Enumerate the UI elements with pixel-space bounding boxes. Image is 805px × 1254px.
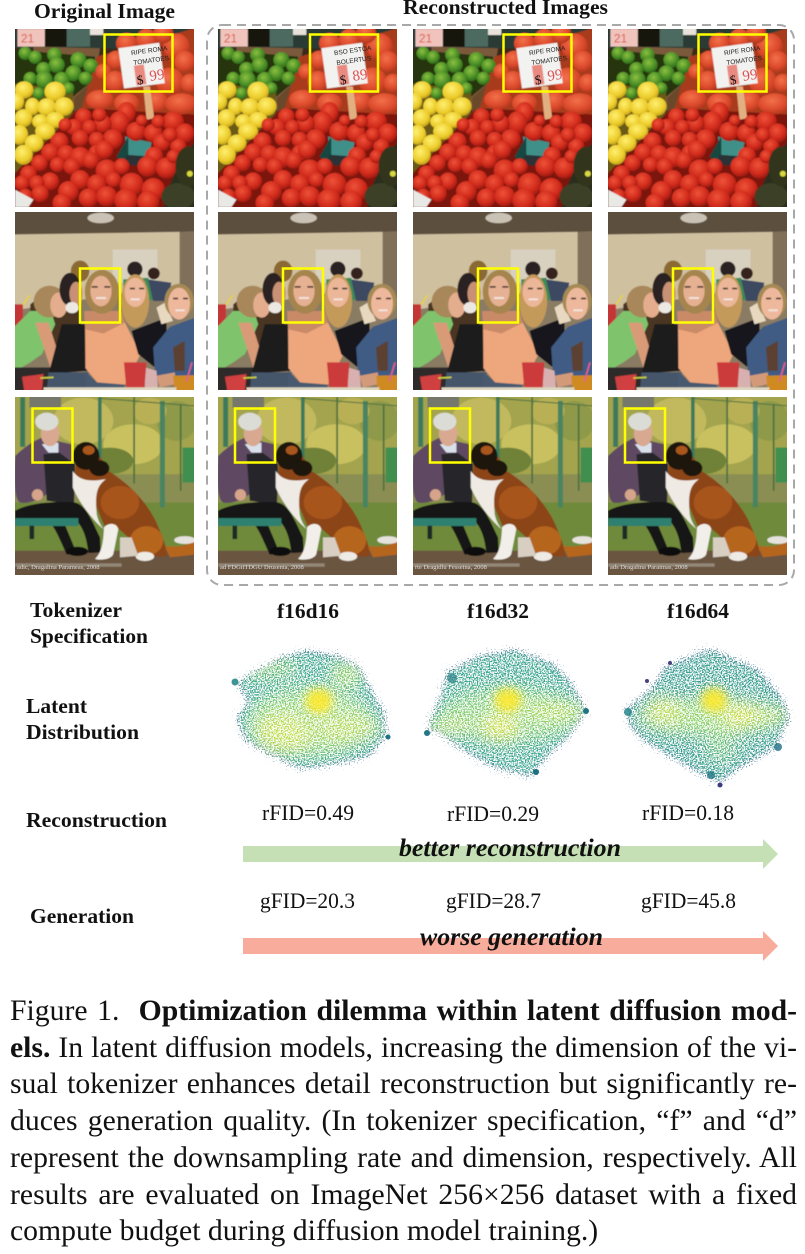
metric: rFID f16d32: rFID=0.29 (447, 801, 539, 826)
column label: f16d16: f16d16 (277, 599, 339, 623)
panel: f16d64 tomatoes image (603, 23, 794, 213)
figure caption: els. In latent diffusion models, increasing the dimension of the vi- (10, 1032, 797, 1064)
panel: f16d16 group photo (213, 208, 403, 397)
panel: f16d64 dog photo: ads Dragalina Paraimas, 2008 (610, 564, 688, 571)
figure caption: compute budget during diffusion model training.) (10, 1215, 598, 1247)
panel: f16d16 tomatoes image: 89 (351, 67, 369, 85)
row label: Generation: Generation (30, 904, 134, 928)
metric: gFID f16d64: gFID=45.8 (641, 888, 736, 913)
figure caption: duces generation quality. (In tokenizer specification, “f” and “d” (10, 1105, 797, 1137)
panel: f16d16 tomatoes image: $ (339, 72, 348, 88)
panel: f16d16 tomatoes image (213, 23, 404, 213)
panel: f16d64 tomatoes image: TOMATOES (726, 55, 763, 67)
metric: rFID f16d64: rFID=0.18 (642, 800, 734, 825)
panel: f16d64 tomatoes image: RIPE ROMA (724, 45, 761, 57)
row label: Tokenizer Specification: Specification (30, 624, 148, 648)
column label: f16d32: f16d32 (467, 599, 529, 623)
column label: f16d64: f16d64 (667, 599, 729, 623)
scatter plot: f16d16 latent distribution (231, 650, 390, 769)
dashed frame around reconstructed images (207, 25, 794, 585)
panel: original tomatoes image: RIPE ROMA (131, 45, 168, 57)
figure caption: Figure 1. Optimization dilemma within latent diffusion mod- (10, 995, 797, 1027)
panel: f16d32 tomatoes image (408, 23, 599, 213)
panel: f16d32 group photo (408, 208, 598, 397)
arrow label: better reconstruction: better reconstruction (399, 835, 621, 862)
arrow: better reconstruction (243, 839, 778, 869)
panel: f16d32 dog photo (408, 391, 598, 581)
row label: Latent Distribution (26, 694, 139, 744)
panel: original tomatoes image (10, 23, 201, 213)
panel: f16d32 dog photo: rte Dragidlu Fesseina, 2008 (415, 564, 487, 571)
metric: rFID f16d16: rFID=0.49 (262, 800, 354, 825)
figure caption: sual tokenizer enhances detail reconstruction but significantly re- (10, 1068, 797, 1100)
row label: Latent Distribution: Distribution (26, 720, 139, 744)
scatter plot: f16d32 latent distribution (424, 649, 589, 777)
panel: f16d16 dog photo: ad FDGitTDGU Drusenia, 2008 (220, 564, 304, 571)
scatter plot: f16d64 latent distribution (624, 648, 790, 788)
panel: f16d64 dog photo (603, 391, 793, 581)
panel: f16d32 tomatoes image: TOMATOES (531, 55, 568, 67)
panel: f16d64 tomatoes image: 99 (741, 67, 759, 85)
panel: f16d32 tomatoes image: $ (534, 72, 543, 88)
panel: original dog photo (10, 391, 200, 581)
panel: f16d16 tomatoes image: BSO ESTOA (334, 45, 372, 57)
panel: original tomatoes image: TOMATOES (133, 55, 170, 67)
panel: f16d32 tomatoes image: 99 (546, 67, 564, 85)
row label: Tokenizer Specification: Tokenizer (30, 598, 122, 622)
panel: f16d32 tomatoes image: RIPE ROMA (529, 45, 566, 57)
panel: original tomatoes image: 99 (148, 67, 166, 85)
figure caption: represent the downsampling rate and dimension, respectively. All (10, 1142, 797, 1174)
arrow: worse generation (243, 931, 778, 961)
panel: f16d16 tomatoes image: BOLERTUS (336, 55, 372, 67)
panel: original dog photo: adic, Dragalina Parameas, 2008 (17, 564, 99, 571)
metric: gFID f16d32: gFID=28.7 (446, 888, 541, 913)
panel: f16d16 dog photo (213, 391, 403, 581)
panel: original group photo (10, 208, 200, 397)
panel: f16d64 group photo (603, 208, 793, 397)
row label: Reconstruction: Reconstruction (26, 808, 167, 832)
metric: gFID f16d16: gFID=20.3 (260, 888, 355, 913)
panel: f16d64 tomatoes image: $ (729, 72, 738, 88)
row label: Tokenizer Specification (30, 598, 148, 648)
row label: Latent Distribution: Latent (26, 694, 88, 718)
figure caption: results are evaluated on ImageNet 256×256 dataset with a fixed (10, 1179, 797, 1211)
arrow label: worse generation: worse generation (420, 924, 603, 951)
figure caption (10, 995, 797, 1247)
panel: original tomatoes image: $ (136, 72, 145, 88)
